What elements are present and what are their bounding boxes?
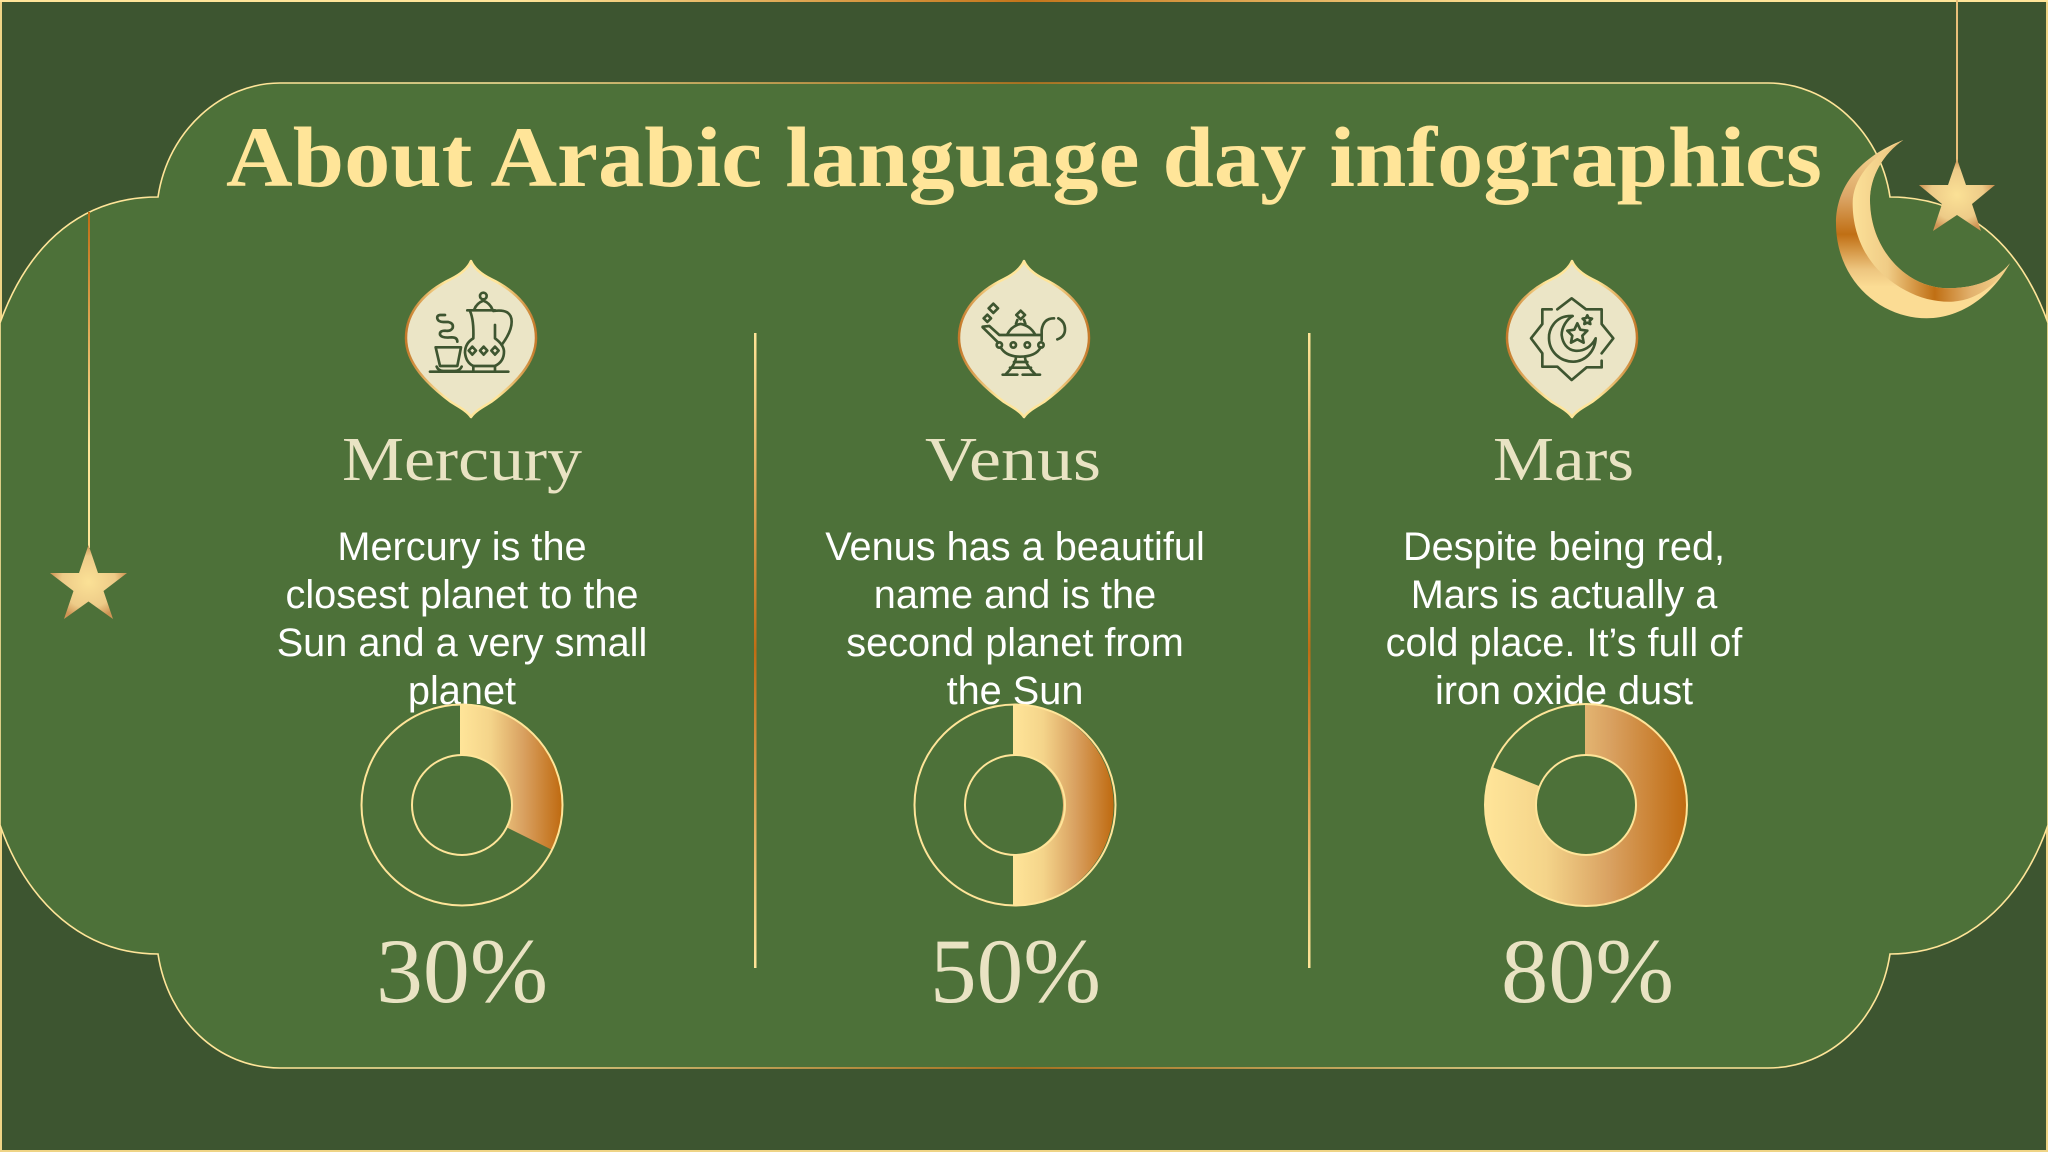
- heading: Venus: Venus: [925, 426, 1101, 494]
- value: 30%: 30%: [376, 920, 548, 1022]
- hanging star right: [1919, 0, 1995, 231]
- chart: 30% donut: [362, 704, 562, 906]
- icon: coffee pot and cup: [406, 261, 536, 417]
- hanging star left: [50, 212, 127, 619]
- text: Mars description: cold place. It’s full of: [1386, 621, 1743, 665]
- icon: magic lamp: [959, 261, 1089, 417]
- column: Venus: [825, 261, 1205, 1022]
- icon: crescent and star emblem: [1507, 261, 1637, 417]
- heading: Mars: Mars: [1493, 426, 1634, 494]
- text: Venus description: Venus has a beautiful: [825, 525, 1205, 569]
- column: Mercury: [277, 261, 647, 1022]
- text: Mars description: Despite being red,: [1403, 525, 1725, 569]
- heading: Mercury: Mercury: [342, 426, 582, 494]
- dividers: [754, 333, 1310, 968]
- value: 80%: 80%: [1501, 920, 1674, 1022]
- text: Mars description: iron oxide dust: [1435, 669, 1693, 713]
- text: Mercury description: Mercury is the: [337, 525, 587, 569]
- chart: 50% donut: [914, 704, 1116, 906]
- crescent moon: [1836, 140, 2010, 318]
- chart: 80% donut: [1485, 704, 1687, 906]
- text: Mercury description: planet: [408, 669, 516, 713]
- column: Mars: [1386, 261, 1743, 1022]
- value: 50%: 50%: [930, 920, 1101, 1022]
- text: Venus description: the Sun: [947, 669, 1083, 713]
- text: Venus description: second planet from: [846, 621, 1184, 665]
- text: Mars description: Mars is actually a: [1411, 573, 1718, 617]
- text: Venus description: name and is the: [874, 573, 1156, 617]
- text: Mercury description: Sun and a very small: [277, 621, 647, 665]
- title: About Arabic language day infographics: [226, 109, 1822, 205]
- text: Mercury description: closest planet to the: [285, 573, 639, 617]
